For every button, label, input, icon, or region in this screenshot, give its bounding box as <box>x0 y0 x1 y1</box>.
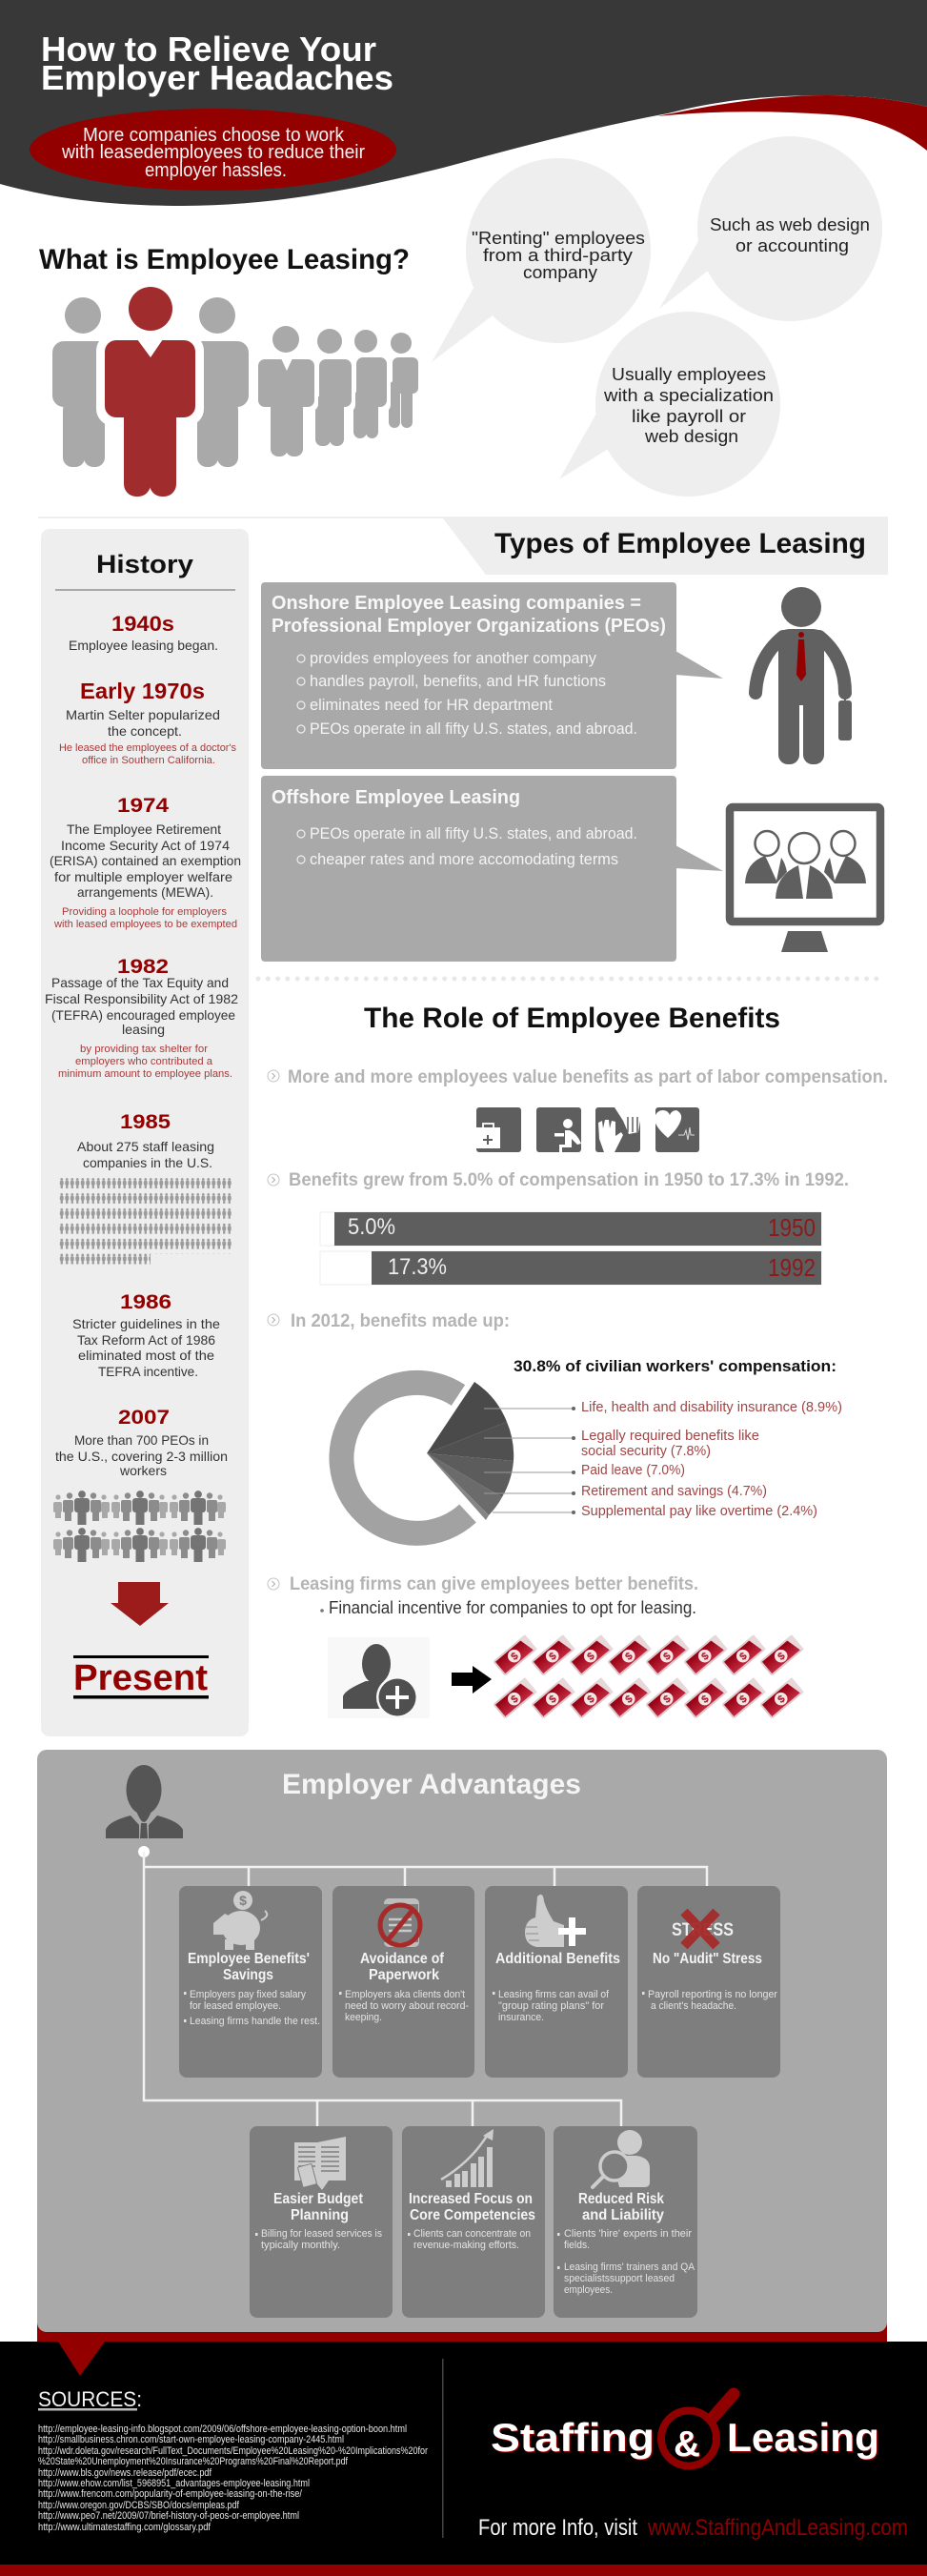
icon: money bills: $ <box>661 1694 674 1706</box>
1985 entry <box>59 1111 232 1265</box>
speech bubble: specialization: web design <box>644 426 738 446</box>
speech bubble: specialization: like payroll or <box>632 406 746 426</box>
1982 entry: (TEFRA) encouraged employee <box>51 1007 235 1023</box>
arrow: to savings <box>452 1666 492 1694</box>
bullet list: PEOs operate in all fifty U.S. states, and abroad. <box>310 720 637 738</box>
1974 entry: The Employee Retirement <box>67 821 221 837</box>
card: reduced risk: Clients 'hire' experts in their <box>564 2228 692 2240</box>
logo: staffing and leasing: Staffing <box>491 2415 655 2460</box>
speech bubble: web design or accounting <box>659 136 882 321</box>
card: increased focus: Increased Focus on <box>409 2191 533 2207</box>
2007 entry: workers <box>119 1463 167 1478</box>
bar: 1950: 5.0% <box>348 1214 395 1240</box>
icon: money bills: $ <box>623 1651 635 1663</box>
icon: money bills: $ <box>547 1651 559 1663</box>
icon: money bills: $ <box>699 1651 712 1663</box>
sources list: http://www.oregon.gov/DCBS/SBO/docs/empleas.pdf <box>38 2500 240 2511</box>
icon: money bills: $ <box>547 1694 559 1706</box>
chart legend <box>484 1399 842 1519</box>
call to action <box>478 2515 908 2541</box>
icon: money bills: $ <box>585 1694 597 1706</box>
icon: 275 small people <box>59 1178 232 1265</box>
icon: money bills: $ <box>776 1694 788 1706</box>
bar: 1992: 1992 <box>768 1253 816 1282</box>
card: reduced risk: fields. <box>564 2240 590 2251</box>
icon: monitor with team <box>730 807 880 952</box>
card: increased focus: Core Competencies <box>410 2207 535 2223</box>
1986 entry: 1986 <box>120 1291 171 1313</box>
icon: helping hands <box>595 1107 640 1152</box>
logo: staffing and leasing: & <box>674 2424 700 2464</box>
benefit point 1: More and more employees value benefits as part of labor compensation. <box>288 1067 888 1087</box>
heading band: types of employee leasing <box>38 517 888 575</box>
card: avoidance of paperwork: Avoidance of <box>360 1951 445 1967</box>
benefit point 2: Benefits grew from 5.0% of compensation in 1950 to 17.3% in 1992. <box>289 1170 849 1190</box>
heading: what is employee leasing: What is Employee Leasing? <box>39 244 410 275</box>
call to action: For more Info, visit <box>478 2515 637 2541</box>
bullet list: provides employees for another company <box>310 650 597 667</box>
chart legend: Legally required benefits like <box>581 1428 759 1444</box>
card: additional benefits: Additional Benefits <box>495 1951 620 1967</box>
card: no audit stress: Payroll reporting is no longer <box>648 1989 777 2000</box>
bullet list: handles payroll, benefits, and HR functions <box>310 673 606 690</box>
icon: money bills: $ <box>509 1651 521 1663</box>
panel: onshore employee leasing: Professional Employer Organizations (PEOs) <box>272 616 666 637</box>
sources list: http://www.peo7.net/2009/07/brief-history-of-peos-or-employee.html <box>38 2510 299 2522</box>
present label: Present <box>73 1658 208 1698</box>
icon: money bills: $ <box>737 1694 750 1706</box>
1974 entry: Providing a loophole for employers <box>62 906 228 918</box>
logo: staffing and leasing <box>491 2394 879 2466</box>
card: easier budget planning <box>250 2126 393 2318</box>
icon: money bills: $ <box>737 1651 750 1663</box>
speech bubble: renting employees: company <box>523 262 598 282</box>
history heading: History <box>96 550 193 578</box>
card: easier budget planning: Planning <box>291 2207 349 2223</box>
sources list: http://www.ultimatestaffing.com/glossary.pdf <box>38 2522 212 2533</box>
speech bubble: specialization <box>559 312 780 497</box>
sources list: http://smallbusiness.chron.com/start-own-employee-leasing-company-2445.html <box>38 2434 344 2445</box>
chart heading: 30.8% of civilian workers' compensation: <box>514 1357 836 1375</box>
card: employee benefits savings: for leased employee. <box>190 2000 281 2012</box>
card: easier budget planning: Billing for leased services is <box>261 2228 382 2240</box>
panel: onshore employee leasing: Onshore Employee Leasing companies = <box>272 593 641 614</box>
card: employee benefits savings: Employers pay fixed salary <box>190 1989 306 2000</box>
sources list: http://wdr.doleta.gov/research/FullText_Documents/Employee%20Leasing%20-%20Implications%20for <box>38 2445 428 2457</box>
subtitle ellipse: with leasedemployees to reduce their <box>61 141 365 163</box>
icon: add employee <box>328 1637 430 1718</box>
icon: money bills: $ <box>585 1651 597 1663</box>
speech bubble: specialization: with a specialization <box>603 385 774 405</box>
1982 entry: minimum amount to employee plans. <box>58 1068 232 1080</box>
header banner <box>0 0 927 206</box>
icon: money bills: $ <box>661 1651 674 1663</box>
card: additional benefits: insurance. <box>498 2012 544 2023</box>
bar: 1992 <box>320 1251 821 1285</box>
1982 entry: 1982 <box>117 956 169 978</box>
1982 entry: leasing <box>122 1022 165 1037</box>
1985 entry: 1985 <box>120 1111 171 1133</box>
logo: staffing and leasing: Leasing <box>727 2415 879 2460</box>
early 1970s entry: Early 1970s <box>80 679 205 703</box>
speech bubble: web design or accounting: or accounting <box>736 235 849 255</box>
card: reduced risk: specialistssupport leased <box>564 2273 675 2284</box>
card: reduced risk: Reduced Risk <box>578 2191 664 2207</box>
dotted divider <box>258 976 886 982</box>
icon: no paperwork <box>380 1898 420 1947</box>
1940s entry: 1940s <box>111 612 174 636</box>
card: avoidance of paperwork: keeping. <box>345 2012 382 2023</box>
icon: row of employees <box>52 287 418 497</box>
card: additional benefits: Leasing firms can avail of <box>498 1989 610 2000</box>
early 1970s entry: He leased the employees of a doctor's <box>59 742 236 754</box>
2007 entry: the U.S., covering 2-3 million <box>55 1449 228 1464</box>
icon: seated employee <box>536 1107 581 1152</box>
connector lines <box>138 1846 707 2126</box>
title: How to Relieve Your <box>41 30 376 69</box>
card: avoidance of paperwork: Paperwork <box>369 1967 439 1983</box>
bar: 1950 <box>320 1212 821 1246</box>
icon: employer silhouette <box>106 1765 183 1838</box>
icon: money bills <box>493 1634 804 1719</box>
1974 entry: Income Security Act of 1974 <box>61 838 230 853</box>
card: avoidance of paperwork: Employers aka clients don't <box>345 1989 465 2000</box>
bar: 1992: 17.3% <box>388 1254 447 1280</box>
card: employee benefits savings <box>179 1886 322 2078</box>
card: reduced risk: employees. <box>564 2284 613 2296</box>
benefit point 4: Financial incentive for companies to opt for leasing. <box>329 1598 696 1617</box>
chart legend: social security (7.8%) <box>581 1443 711 1459</box>
icon: groups of workers <box>53 1491 226 1562</box>
bullet list: PEOs operate in all fifty U.S. states, and abroad. <box>310 825 637 842</box>
sources heading: SOURCES: <box>38 2387 142 2411</box>
1982 entry: by providing tax shelter for <box>80 1044 208 1055</box>
icon: medical bag <box>476 1107 521 1152</box>
1974 entry: (ERISA) contained an exemption <box>50 853 241 868</box>
1986 entry: Tax Reform Act of 1986 <box>77 1332 215 1348</box>
card: increased focus: Clients can concentrate on <box>413 2228 531 2240</box>
card: employee benefits savings: Leasing firms handle the rest. <box>190 2016 320 2027</box>
1940s entry <box>69 612 218 653</box>
arrow: down to present <box>111 1582 169 1626</box>
icon: budget book <box>294 2137 346 2190</box>
speech bubble: renting employees: from a third-party <box>483 245 634 265</box>
footer <box>0 2342 927 2576</box>
icon: money bills: $ <box>776 1651 788 1663</box>
1982 entry: Fiscal Responsibility Act of 1982 <box>45 991 238 1006</box>
card: additional benefits <box>485 1886 628 2078</box>
icon: money bills: $ <box>509 1694 521 1706</box>
1974 entry: arrangements (MEWA). <box>77 884 213 900</box>
early 1970s entry: office in Southern California. <box>82 755 215 766</box>
1982 entry <box>45 956 238 1080</box>
title: Employer Headaches <box>41 58 393 97</box>
1974 entry: for multiple employer welfare <box>54 869 232 884</box>
1986 entry: TEFRA incentive. <box>98 1364 198 1379</box>
benefit point 4: Leasing firms can give employees better benefits. <box>290 1574 698 1594</box>
icon: money bills: $ <box>623 1694 635 1706</box>
icon: magnifier over person <box>593 2130 650 2187</box>
card: no audit stress: a client's headache. <box>651 2000 736 2012</box>
bullet list: eliminates need for HR department <box>310 697 553 714</box>
card: increased focus: revenue-making efforts. <box>413 2240 519 2251</box>
chart legend: Paid leave (7.0%) <box>581 1462 685 1478</box>
chart legend: Life, health and disability insurance (8.9%) <box>581 1399 842 1415</box>
panel: onshore employee leasing <box>261 582 723 769</box>
bar: 1950: 1950 <box>768 1213 816 1242</box>
1986 entry: Stricter guidelines in the <box>72 1316 220 1331</box>
1985 entry: companies in the U.S. <box>83 1155 212 1170</box>
sources list: http://www.bls.gov/news.release/pdf/ecec.pdf <box>38 2467 212 2479</box>
icon: crossed out stress <box>672 1912 734 1946</box>
pie chart: share of compensation <box>341 1382 514 1533</box>
2007 entry: More than 700 PEOs in <box>74 1432 209 1448</box>
sources list <box>38 2424 428 2533</box>
bar chart: benefit growth <box>320 1212 821 1285</box>
1974 entry <box>50 795 241 930</box>
sources list: http://www.frencom.com/popularity-of-employee-leasing-on-the-rise/ <box>38 2488 303 2500</box>
benefit point 3: In 2012, benefits made up: <box>291 1311 510 1331</box>
1974 entry: 1974 <box>117 795 169 817</box>
icon: heart with pulse <box>655 1107 699 1152</box>
subtitle ellipse <box>30 109 396 191</box>
chart legend: Retirement and savings (4.7%) <box>581 1483 767 1499</box>
panel: offshore employee leasing: Offshore Employee Leasing <box>272 787 520 808</box>
footer pointer <box>58 2342 105 2376</box>
icon: money bills: $ <box>699 1694 712 1706</box>
icon: crossed out stress: STRESS <box>672 1920 734 1940</box>
early 1970s entry: the concept. <box>108 723 182 739</box>
icon: thumbs up plus <box>525 1895 586 1947</box>
panel: employer advantages <box>37 1750 887 2342</box>
icon: growth chart <box>441 2129 494 2187</box>
title <box>41 30 393 97</box>
card: employee benefits savings: Savings <box>223 1967 273 1983</box>
bullet list: cheaper rates and more accomodating terms <box>310 851 618 868</box>
2007 entry <box>53 1407 228 1562</box>
subtitle ellipse: More companies choose to work <box>83 124 345 146</box>
bullet list <box>297 825 637 868</box>
heading: role of employee benefits: The Role of Employee Benefits <box>364 1003 780 1034</box>
icon: piggy bank <box>213 1891 267 1950</box>
sources list: http://www.ehow.com/list_5968951_advantages-employee-leasing.html <box>38 2478 310 2489</box>
sources list: http://employee-leasing-info.blogspot.com/2009/06/offshore-employee-leasing-option-boon.html <box>38 2424 407 2435</box>
card: increased focus <box>402 2126 545 2318</box>
card: reduced risk: Leasing firms' trainers and QA <box>564 2262 695 2273</box>
1982 entry: employers who contributed a <box>75 1056 213 1067</box>
card: no audit stress: No "Audit" Stress <box>653 1951 762 1967</box>
card: employee benefits savings: Employee Benefits' <box>188 1951 310 1967</box>
1986 entry <box>72 1291 220 1379</box>
card: easier budget planning: typically monthly. <box>261 2240 340 2251</box>
subtitle ellipse: employer hassles. <box>145 159 287 181</box>
1982 entry: Passage of the Tax Equity and <box>51 975 229 990</box>
2007 entry: 2007 <box>118 1407 170 1429</box>
advantages heading: Employer Advantages <box>282 1769 581 1800</box>
card: additional benefits: "group rating plans" for <box>498 2000 604 2012</box>
bullet list <box>297 650 637 738</box>
card: no audit stress <box>637 1886 780 2078</box>
speech bubble: renting employees <box>432 158 651 362</box>
early 1970s entry <box>59 679 236 766</box>
1985 entry: About 275 staff leasing <box>77 1139 214 1154</box>
icon: piggy bank: $ <box>239 1893 247 1908</box>
icon: employee with briefcase <box>756 587 852 764</box>
card: reduced risk: and Liability <box>582 2207 664 2223</box>
1986 entry: eliminated most of the <box>78 1348 214 1363</box>
card: reduced risk <box>554 2126 697 2318</box>
speech bubble: specialization: Usually employees <box>612 364 766 384</box>
panel: offshore employee leasing <box>261 776 723 962</box>
1940s entry: Employee leasing began. <box>69 638 218 653</box>
sources list: %20State%20Unemployment%20Insurance%20Programs%20Final%20Report.pdf <box>38 2456 349 2467</box>
card: avoidance of paperwork <box>333 1886 474 2078</box>
speech bubble: renting employees: "Renting" employees <box>472 228 645 248</box>
early 1970s entry: Martin Selter popularized <box>66 707 220 722</box>
speech bubble: web design or accounting: Such as web design <box>710 214 870 234</box>
1974 entry: with leased employees to be exempted <box>53 919 237 930</box>
benefit point 4 <box>268 1574 698 1617</box>
chart legend: Supplemental pay like overtime (2.4%) <box>581 1503 817 1519</box>
card: easier budget planning: Easier Budget <box>273 2191 363 2207</box>
card: avoidance of paperwork: need to worry about record- <box>345 2000 469 2012</box>
heading band: types of employee leasing: Types of Employee Leasing <box>494 528 866 559</box>
panel: history timeline <box>41 529 249 1736</box>
